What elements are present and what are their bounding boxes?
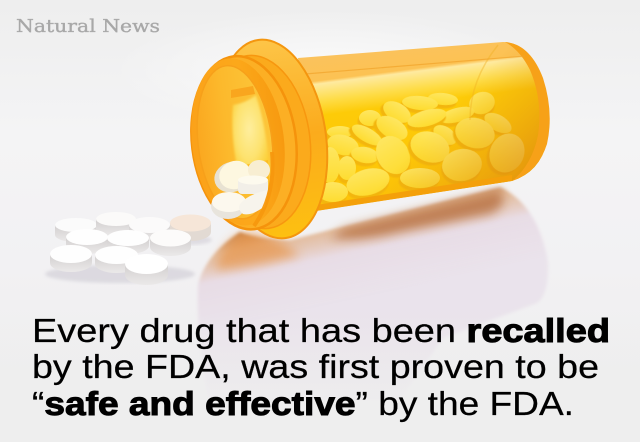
line 1: Every drug that has been recalled	[32, 312, 610, 349]
pills on the table	[45, 212, 212, 285]
brand: Natural News: Natural News	[16, 16, 160, 37]
bottle reflection	[198, 187, 548, 400]
bottle opening	[182, 53, 294, 231]
white pills in opening	[210, 156, 270, 219]
headline	[32, 312, 610, 422]
front rim lip	[254, 152, 273, 226]
pills inside bottle	[318, 57, 543, 211]
text backing fade	[0, 315, 640, 442]
inner ledge	[231, 86, 255, 98]
line 2: by the FDA, was first proven to be	[32, 348, 599, 385]
pill shadows	[45, 265, 195, 283]
top highlight lines	[305, 56, 525, 74]
line 3: “safe and effective ” by the FDA.	[32, 385, 574, 422]
inner window	[232, 95, 270, 180]
pill bottle	[182, 32, 550, 246]
flange collar	[205, 32, 339, 246]
bottle body	[298, 42, 549, 211]
bottle base ring	[505, 42, 550, 181]
neck bands	[182, 48, 320, 236]
